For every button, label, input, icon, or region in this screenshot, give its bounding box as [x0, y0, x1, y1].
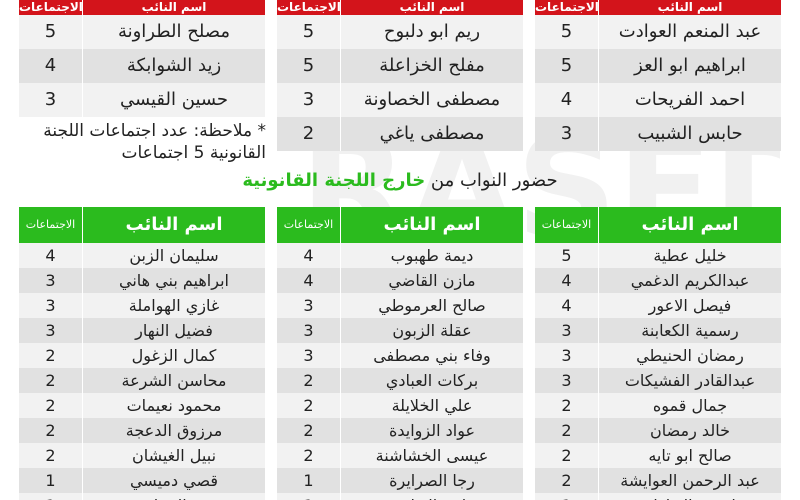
table: red right: احمد الفريحات — [635, 89, 745, 110]
table: red left: الاجتماعات — [19, 0, 83, 14]
table: green right: عبد الرحمن العوايشة — [620, 471, 760, 490]
table: red left: زيد الشوابكة — [127, 55, 221, 76]
table: green left: 3 — [45, 296, 56, 315]
table: green middle — [277, 207, 523, 500]
table: green left — [19, 207, 265, 500]
heading: حضور النواب من خارج اللجنة القانونية — [242, 170, 558, 191]
table: green middle: علي الخلايلة — [392, 396, 472, 415]
table: red right: عبد المنعم العوادت — [619, 21, 761, 42]
table: green middle: مازن القاضي — [388, 271, 476, 290]
table: green middle: عقلة الزبون — [392, 321, 472, 340]
table: red middle: 5 — [303, 21, 314, 42]
table: green left: اسم النائب — [125, 214, 223, 235]
table: red left: اسم النائب — [142, 0, 206, 14]
table: green right: رمضان الحنيطي — [636, 346, 744, 365]
table: green left: الاجتماعات — [26, 218, 75, 231]
table: green left: 2 — [45, 371, 56, 390]
table: green right: 4 — [561, 271, 572, 290]
table: red left: حسين القيسي — [120, 89, 228, 110]
table: green right: 2 — [561, 471, 572, 490]
table: green left: كمال الزغول — [132, 346, 216, 365]
table: red middle — [277, 0, 523, 151]
table: red right: حابس الشبيب — [637, 123, 743, 144]
table: red middle: مصطفى الخصاونة — [364, 89, 500, 110]
table: green middle: وفاء بني مصطفى — [373, 346, 491, 365]
table: green right: خليل عطية — [653, 246, 727, 265]
table: green middle: عيسى الخشاشنة — [376, 446, 488, 465]
table: green right: 2 — [561, 396, 572, 415]
table: red middle: 2 — [303, 123, 314, 144]
table: green right: 2 — [561, 446, 572, 465]
table: red left: 5 — [45, 21, 56, 42]
table: green right — [535, 207, 781, 500]
table: green left: قصي دميسي — [130, 471, 218, 490]
table: red right: الاجتماعات — [535, 0, 599, 14]
table: red middle: الاجتماعات — [277, 0, 341, 14]
table: green left: 2 — [45, 346, 56, 365]
table: green middle: بركات العبادي — [386, 371, 478, 390]
table: green middle: عواد الزوايدة — [389, 421, 475, 440]
table: green left: 3 — [45, 321, 56, 340]
table: green middle: 2 — [303, 396, 314, 415]
table: red left — [19, 0, 265, 117]
table: green left: 1 — [45, 471, 56, 490]
table: green right: 3 — [561, 371, 572, 390]
table: green right: عبدالقادر الفشيكات — [625, 371, 755, 390]
table: green middle: 3 — [303, 346, 314, 365]
table: red middle: 3 — [303, 89, 314, 110]
table: red middle: ريم ابو دلبوح — [384, 21, 480, 42]
note: * ملاحظة: عدد اجتماعات اللجنة القانونية 5 اجتماعات — [43, 121, 266, 163]
table: green right: صالح ابو تايه — [648, 446, 732, 465]
table: red middle: 5 — [303, 55, 314, 76]
table: green right: 5 — [561, 246, 572, 265]
table: red right: 3 — [561, 123, 572, 144]
table: green left: 2 — [45, 446, 56, 465]
table: green right: 3 — [561, 346, 572, 365]
table: green left: 3 — [45, 271, 56, 290]
table: green right: 2 — [561, 421, 572, 440]
table: green left: 4 — [45, 246, 56, 265]
table: green middle: 3 — [303, 296, 314, 315]
table: green middle: 2 — [303, 421, 314, 440]
table: green middle: 4 — [303, 271, 314, 290]
table: green left: فضيل النهار — [135, 321, 213, 340]
table: green right: اسم النائب — [641, 214, 739, 235]
table: green middle: صالح العرموطي — [378, 296, 486, 315]
table: green middle: 4 — [303, 246, 314, 265]
table: green left: مرزوق الدعجة — [126, 421, 222, 440]
table: green right: عبدالكريم الدغمي — [631, 271, 749, 290]
table: red right: اسم النائب — [658, 0, 722, 14]
table: green right: 3 — [561, 321, 572, 340]
table: green right: جمال قموه — [653, 396, 727, 415]
table: green middle: ديمة طهبوب — [391, 246, 473, 265]
table: green middle: 3 — [303, 321, 314, 340]
table: red right: 5 — [561, 21, 572, 42]
table: green right: خالد رمضان — [650, 421, 730, 440]
table: red left: 3 — [45, 89, 56, 110]
table: red right: 5 — [561, 55, 572, 76]
table: green right: فيصل الاعور — [649, 296, 731, 315]
table: green middle: الاجتماعات — [284, 218, 333, 231]
table: green left: محاسن الشرعة — [122, 371, 226, 390]
table: red middle: اسم النائب — [400, 0, 464, 14]
table: red left: مصلح الطراونة — [118, 21, 230, 42]
table: green left: 2 — [45, 396, 56, 415]
table: green right: الاجتماعات — [542, 218, 591, 231]
table: green middle: 1 — [303, 471, 314, 490]
table: green left: محمود نعيمات — [127, 396, 221, 415]
table: red middle: مصطفى ياغي — [380, 123, 484, 144]
table: green right: 4 — [561, 296, 572, 315]
table: red right — [535, 0, 781, 151]
table: green middle: رجا الصرايرة — [389, 471, 475, 490]
table: red right: 4 — [561, 89, 572, 110]
table: green left: ابراهيم بني هاني — [119, 271, 229, 290]
table: green right: رسمية الكعابنة — [641, 321, 739, 340]
table: green middle: 2 — [303, 371, 314, 390]
table: green middle: اسم النائب — [383, 214, 481, 235]
table: green left: غازي الهواملة — [129, 296, 219, 315]
table: green middle: 2 — [303, 446, 314, 465]
table: green left: سليمان الزبن — [129, 246, 219, 265]
table: red right: ابراهيم ابو العز — [634, 55, 746, 76]
table: red middle: مفلح الخزاعلة — [379, 55, 485, 76]
table: red left: 4 — [45, 55, 56, 76]
table: green left: نبيل الغيشان — [132, 446, 216, 465]
table: green left: 2 — [45, 421, 56, 440]
